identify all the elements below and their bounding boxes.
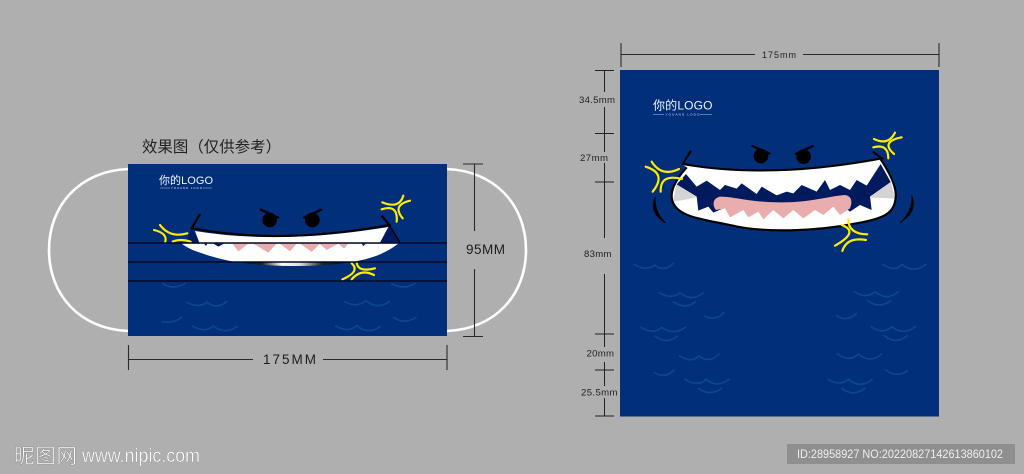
fold lines	[128, 243, 447, 281]
logo: preview: 你的LOGO	[159, 173, 213, 187]
dimension: preview height	[463, 164, 505, 336]
anger marks: flat	[646, 133, 902, 251]
watermark: nipic: 昵图网	[14, 445, 77, 468]
dimension: flat height segments	[579, 70, 618, 416]
dimension: flat width	[621, 43, 939, 67]
dimension: preview height: 95MM	[466, 242, 505, 257]
dimension: flat height segments: 27mm	[580, 153, 608, 164]
waves: flat left	[634, 263, 729, 392]
watermark: nipic	[14, 445, 200, 468]
id badge: ID:28958927 NO:20220827142613860102	[797, 447, 1003, 461]
dimension: preview width	[128, 345, 447, 370]
dimension: flat height segments: 34.5mm	[579, 95, 615, 106]
heading: preview title: 效果图（仅供参考）	[142, 138, 281, 156]
ear loop: right	[447, 169, 526, 331]
logo: flat: 你的LOGO	[653, 98, 712, 112]
panel: mask preview	[128, 164, 447, 340]
id badge	[787, 444, 1015, 464]
ear loop: left	[49, 169, 128, 331]
waves: flat right	[828, 264, 926, 393]
dimension: flat height segments: 25.5mm	[581, 388, 618, 398]
logo: flat: YOUAND LOGO	[666, 112, 700, 116]
dimension: flat height segments: 20mm	[586, 348, 614, 360]
shark mouth: preview	[182, 209, 400, 266]
anger marks: preview	[154, 196, 410, 279]
dimension: flat height segments: 83mm	[584, 249, 612, 260]
dimension: flat width: 175mm	[762, 50, 796, 60]
watermark: nipic: www.nipic.com	[81, 446, 200, 467]
dimension: preview width: 175MM	[263, 352, 316, 367]
logo: preview: YOUAND LOGO	[171, 186, 203, 190]
waves: preview	[162, 283, 416, 340]
shark mouth: flat	[653, 146, 913, 230]
panel: flat mask design	[620, 70, 939, 416]
